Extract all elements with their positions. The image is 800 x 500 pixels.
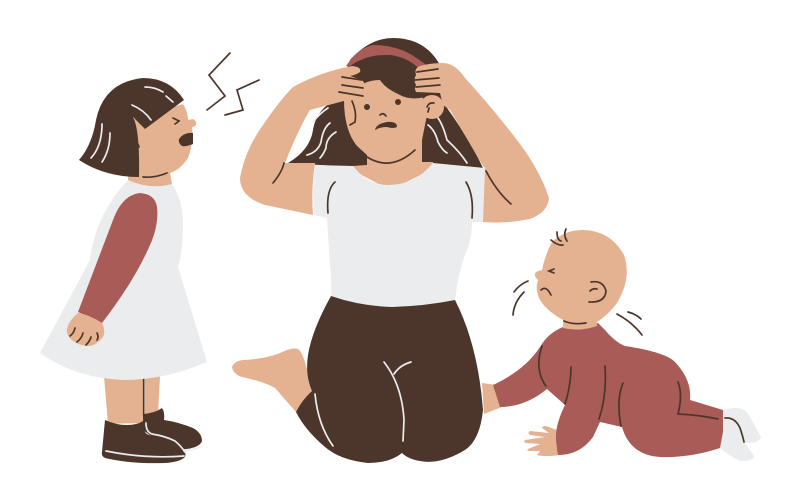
mother right arm and hand	[414, 63, 549, 223]
girl open mouth	[179, 133, 193, 146]
mother	[232, 38, 549, 463]
mother foot	[232, 348, 312, 412]
mother shirt	[313, 163, 485, 307]
girl face lines	[133, 118, 179, 177]
mother front hair	[347, 55, 426, 98]
girl shoe highlights	[106, 423, 200, 457]
girl legs	[104, 376, 160, 424]
girl fist	[67, 313, 104, 346]
girl fingers	[70, 328, 98, 345]
mother arm and shirt lines	[273, 163, 511, 218]
baby hand behind mother	[482, 383, 502, 414]
mother left arm and hand	[240, 66, 365, 215]
girl neck and face	[128, 104, 196, 190]
baby crawling	[493, 229, 761, 461]
mother headband	[346, 45, 428, 73]
mother hair strands	[307, 108, 467, 163]
baby suit	[493, 323, 723, 457]
mother ear	[420, 95, 444, 119]
mother pants highlights	[315, 362, 411, 446]
mother back hair	[288, 38, 483, 170]
girl dress	[40, 180, 207, 380]
baby hand	[524, 426, 560, 456]
girl ear	[122, 135, 144, 157]
girl sleeve	[78, 193, 157, 323]
baby cry marks	[513, 281, 642, 335]
girl back shoe	[143, 408, 202, 450]
lightning shout marks	[207, 53, 259, 115]
girl shouting	[40, 78, 207, 463]
mother finger lines	[339, 69, 440, 96]
mother face	[350, 99, 434, 163]
mother pants	[296, 296, 483, 463]
baby hair and face lines	[541, 229, 606, 324]
girl front shoe	[102, 420, 185, 463]
girl hair highlights	[91, 87, 173, 162]
baby suit lines	[539, 346, 744, 442]
baby socks	[720, 408, 761, 461]
mother neck and face	[344, 75, 435, 190]
baby head	[535, 230, 627, 330]
girl hair	[79, 78, 184, 177]
girl leg line	[143, 379, 145, 416]
